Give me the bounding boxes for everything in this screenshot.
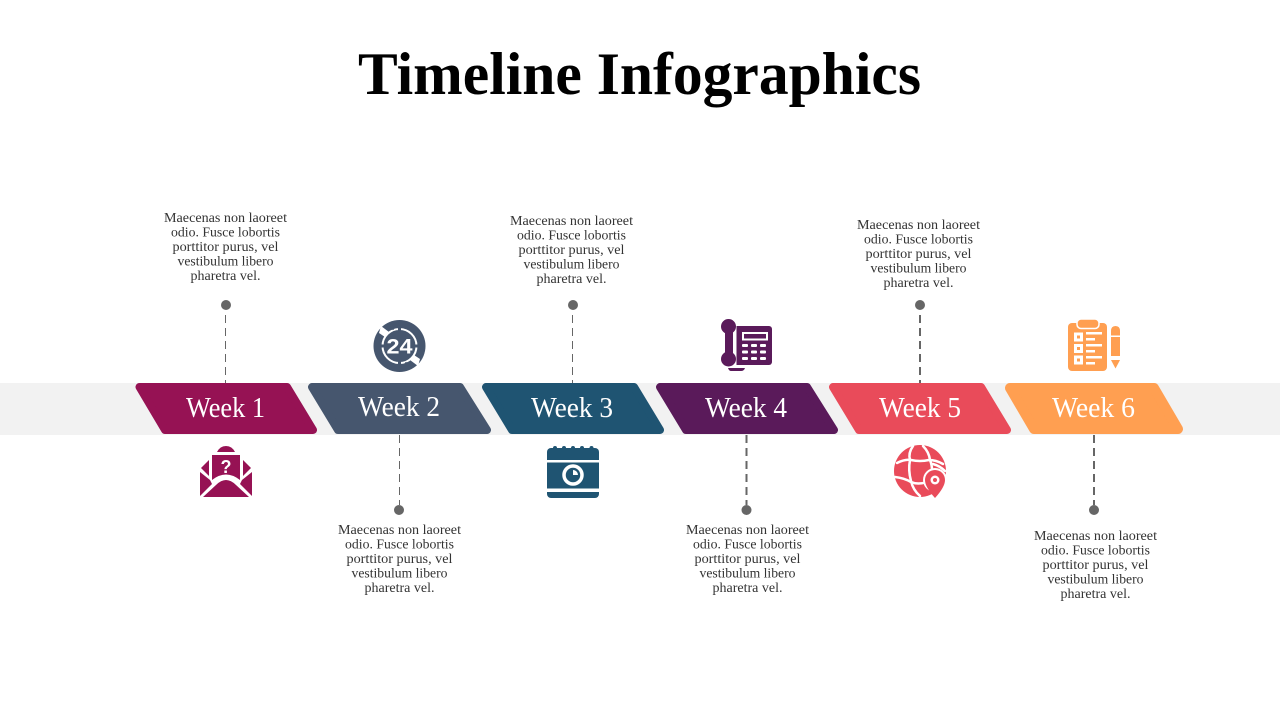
week 5 banner — [833, 387, 1007, 430]
week 5 text — [857, 218, 980, 291]
week 4 text: odio. Fusce lobortis — [693, 538, 802, 552]
week 2 banner — [312, 387, 487, 430]
week 1 text: Maecenas non laoreet — [164, 211, 287, 226]
week 3 text: pharetra vel. — [536, 272, 606, 287]
week 3 banner — [486, 387, 660, 430]
week 6 text: vestibulum libero — [1048, 572, 1144, 588]
week 5 text: pharetra vel. — [884, 276, 954, 291]
week 2 text: Maecenas non laoreet — [338, 523, 461, 538]
week 1 banner — [140, 387, 313, 430]
week 2 text: vestibulum libero — [352, 566, 448, 582]
icon: 24 hours: 24 — [386, 336, 413, 358]
icon: 24 hours — [374, 320, 426, 372]
week 1 banner: Week 1 — [186, 393, 265, 424]
week 5 connector — [915, 300, 925, 383]
title: Timeline Infographics — [358, 41, 921, 107]
week 6 banner — [1010, 388, 1178, 429]
week 5 text: odio. Fusce lobortis — [864, 232, 973, 248]
icon: calendar with clock — [547, 446, 599, 498]
week 6 text — [1034, 529, 1157, 602]
week 5 text: vestibulum libero — [870, 262, 966, 276]
week 4 connector — [742, 435, 752, 515]
week 6 text: porttitor purus, vel — [1042, 558, 1149, 573]
week 4 text: Maecenas non laoreet — [686, 523, 809, 538]
timeline band — [0, 383, 1280, 435]
week 3 text — [510, 214, 633, 287]
week 4 text — [686, 523, 809, 596]
week 3 connector — [568, 300, 578, 383]
icon: envelope with question mark: ? — [220, 457, 232, 477]
week 1 text: vestibulum libero — [178, 254, 274, 270]
week 2 text — [338, 523, 461, 596]
week 6 text: pharetra vel. — [1060, 587, 1130, 602]
week 2 text: porttitor purus, vel — [346, 552, 453, 567]
week 1 text: porttitor purus, vel — [172, 240, 279, 255]
week 3 text: Maecenas non laoreet — [510, 214, 633, 229]
week 2 banner: Week 2 — [358, 392, 440, 423]
week 1 text — [164, 211, 287, 284]
week 6 connector — [1089, 435, 1099, 515]
icon: clipboard checklist with pencil — [1068, 319, 1120, 371]
week 2 connector — [394, 435, 404, 515]
icon: envelope with question mark — [200, 446, 252, 497]
week 1 text: pharetra vel. — [190, 269, 260, 284]
week 3 banner: Week 3 — [531, 393, 613, 424]
week 6 text: odio. Fusce lobortis — [1041, 544, 1150, 558]
week 2 text: odio. Fusce lobortis — [345, 538, 454, 552]
week 5 banner: Week 5 — [879, 393, 961, 424]
week 5 text: Maecenas non laoreet — [857, 218, 980, 233]
week 4 text: porttitor purus, vel — [694, 552, 801, 567]
week 4 banner: Week 4 — [705, 393, 787, 424]
icon: globe with location pin — [894, 445, 947, 498]
week 1 text: odio. Fusce lobortis — [171, 226, 280, 240]
week 4 text: pharetra vel. — [712, 581, 782, 596]
week 3 text: porttitor purus, vel — [518, 243, 625, 258]
week 3 text: vestibulum libero — [524, 258, 620, 272]
week 1 connector — [221, 300, 231, 383]
icon: desk telephone — [721, 319, 772, 371]
week 2 text: pharetra vel. — [364, 581, 434, 596]
week 6 text: Maecenas non laoreet — [1034, 529, 1157, 544]
week 3 text: odio. Fusce lobortis — [517, 228, 626, 244]
week 4 banner — [660, 387, 834, 430]
week 4 text: vestibulum libero — [700, 566, 796, 582]
week 6 banner: Week 6 — [1052, 393, 1135, 424]
week 5 text: porttitor purus, vel — [866, 247, 972, 262]
